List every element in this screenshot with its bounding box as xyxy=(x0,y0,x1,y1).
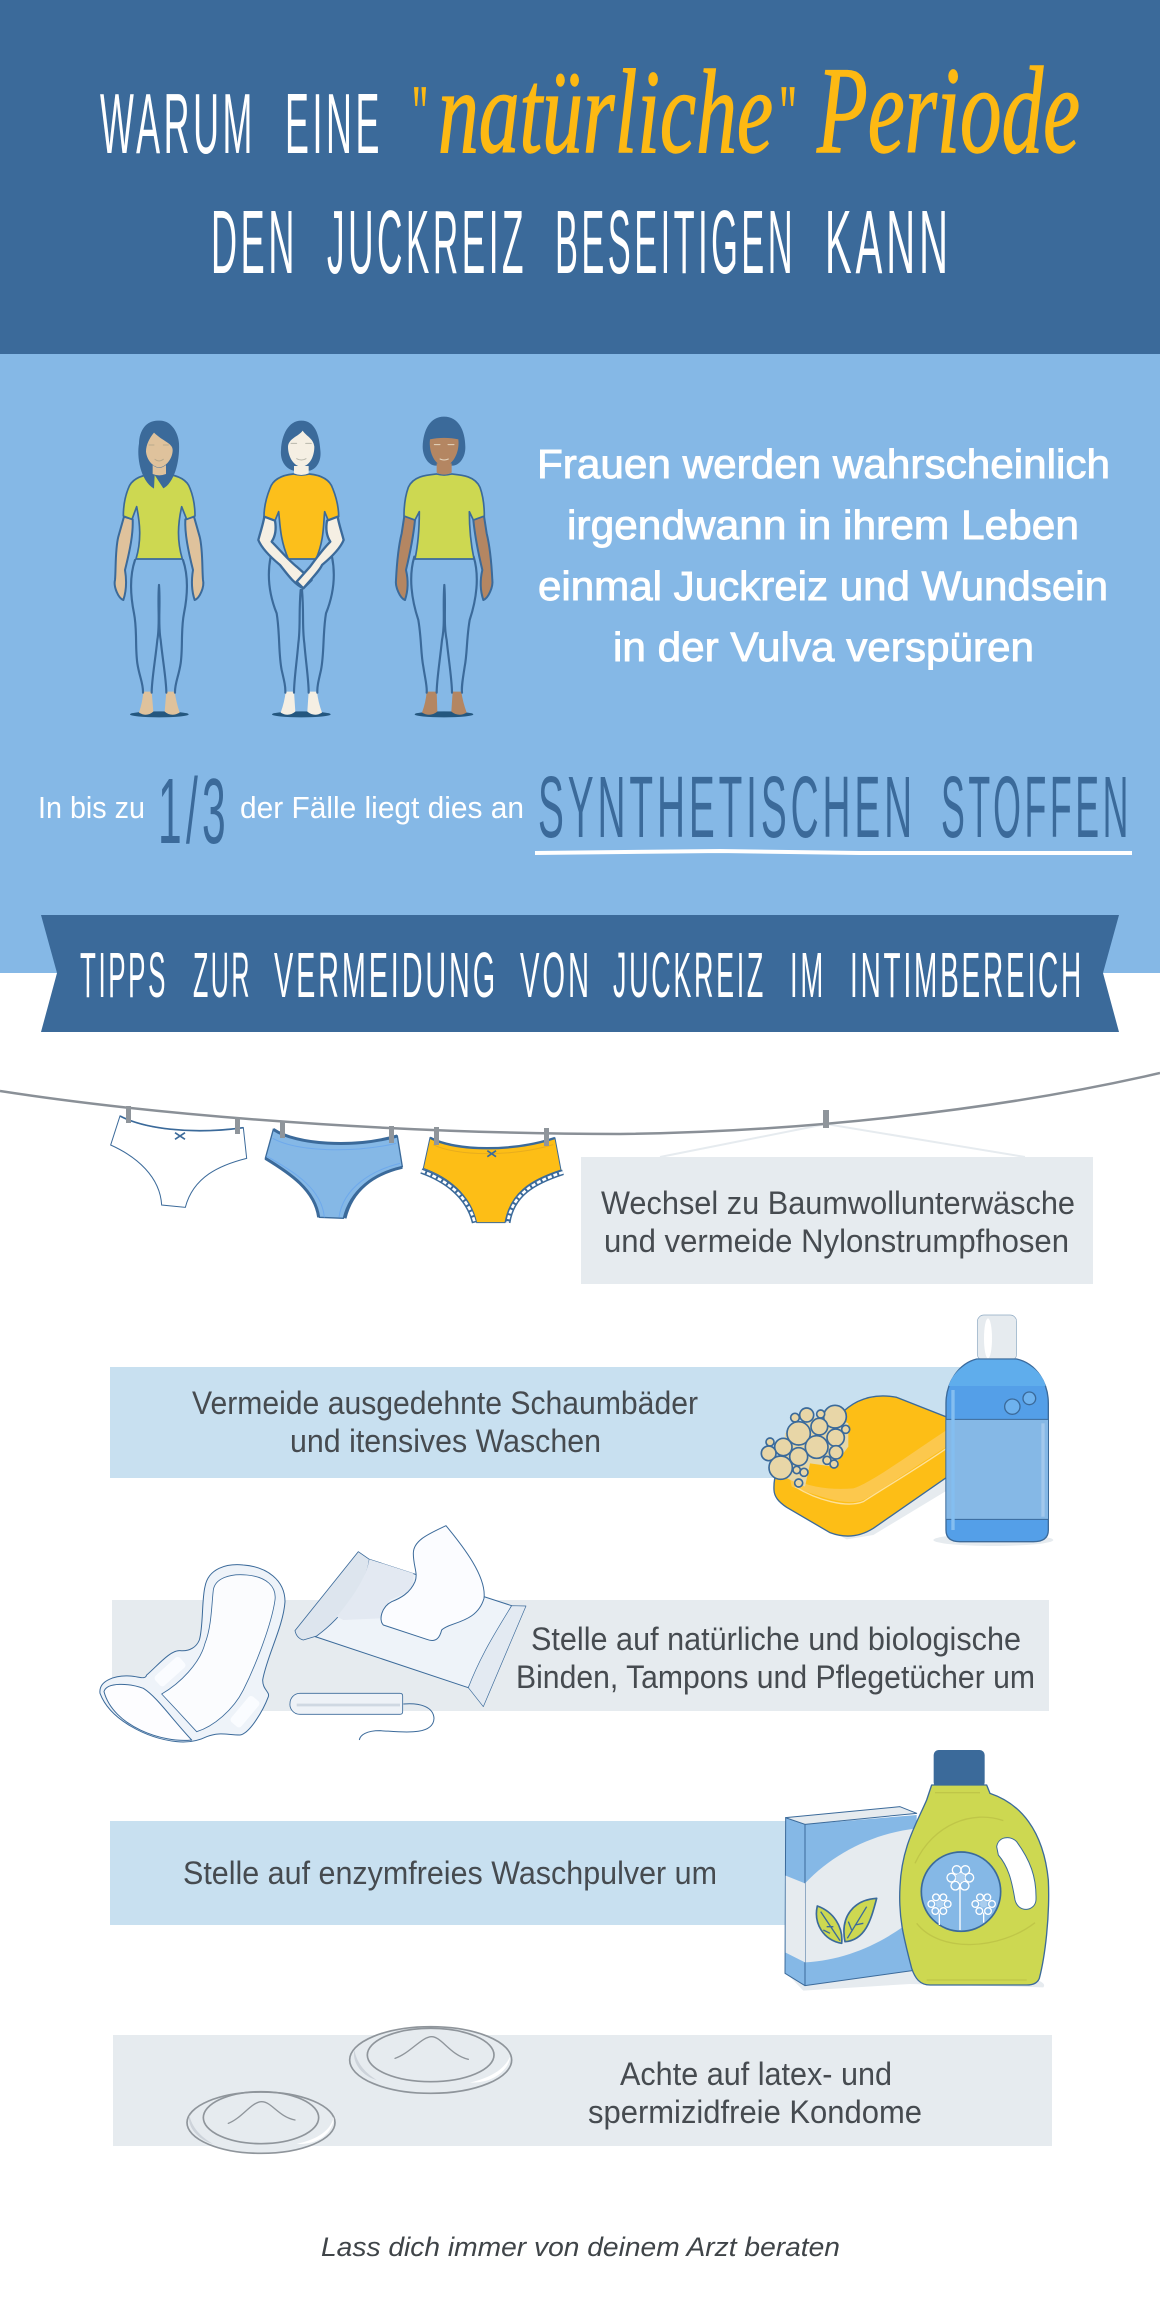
banner: JUCKREIZ xyxy=(613,939,766,1011)
clothesline with underwear xyxy=(0,1073,1160,1223)
icon: sanitary pad xyxy=(100,1565,285,1742)
title: JUCKREIZ xyxy=(327,193,527,293)
banner: VON xyxy=(520,939,592,1011)
tip 2 panel: und itensives Waschen xyxy=(290,1423,601,1459)
banner xyxy=(41,915,1119,1032)
panel: light blue intro xyxy=(0,354,1160,973)
icon: soap and bottle xyxy=(761,1315,1053,1546)
tip 2 panel: Vermeide ausgedehnte Schaumbäder xyxy=(192,1385,698,1421)
intro statement: in der Vulva verspüren xyxy=(613,624,1034,670)
one third statistic: der Fälle liegt dies an xyxy=(240,790,524,825)
tip 3 panel: Binden, Tampons und Pflegetücher um xyxy=(516,1659,1035,1695)
title: DEN xyxy=(211,193,298,293)
title: " xyxy=(777,70,799,158)
banner: VERMEIDUNG xyxy=(274,939,498,1011)
one third statistic xyxy=(38,759,1132,863)
tip 1 panel: Wechsel zu Baumwollunterwäsche xyxy=(601,1185,1075,1221)
title: " xyxy=(410,70,430,158)
tip 3 panel xyxy=(112,1600,1049,1711)
footer note: Lass dich immer von deinem Arzt beraten xyxy=(321,2232,840,2262)
tip 4 panel xyxy=(110,1821,790,1925)
panel: header xyxy=(0,0,1160,354)
tip 5 panel: spermizidfreie Kondome xyxy=(588,2094,922,2130)
tip 5 panel: Achte auf latex- und xyxy=(620,2056,892,2092)
tip 1 panel: und vermeide Nylonstrumpfhosen xyxy=(604,1223,1069,1259)
one third statistic: In bis zu xyxy=(38,790,145,825)
title: natürliche xyxy=(438,45,773,178)
icon: condoms xyxy=(187,2027,512,2153)
title xyxy=(100,42,1080,293)
three women illustration xyxy=(115,417,492,717)
banner: ZUR xyxy=(193,939,252,1011)
icon: condom small xyxy=(187,2092,335,2153)
intro statement xyxy=(537,441,1110,670)
title: WARUM xyxy=(100,77,256,172)
icon: tampon xyxy=(290,1693,434,1740)
tip 4 panel: Stelle auf enzymfreies Waschpulver um xyxy=(183,1855,717,1891)
intro statement: irgendwann in ihrem Leben xyxy=(567,502,1079,548)
banner: TIPPS xyxy=(80,939,168,1011)
tip 1 panel xyxy=(581,1124,1093,1284)
intro statement: einmal Juckreiz und Wundsein xyxy=(538,563,1108,609)
woman 3 xyxy=(396,417,492,717)
icon: soap with foam xyxy=(761,1396,953,1539)
icon: washing powder box xyxy=(785,1807,917,1986)
icon: wipes pack xyxy=(295,1526,526,1707)
icon: bottle xyxy=(933,1315,1053,1546)
tip 2 panel xyxy=(110,1367,960,1478)
icon: detergent box and bottle xyxy=(785,1750,1049,1991)
intro statement: Frauen werden wahrscheinlich xyxy=(537,441,1110,487)
tip 3 panel: Stelle auf natürliche und biologische xyxy=(531,1621,1021,1657)
tip 5 panel xyxy=(113,2035,1052,2146)
icon: pad, wipes and tampon xyxy=(100,1526,526,1742)
banner: IM xyxy=(790,939,826,1011)
title: EINE xyxy=(285,77,383,172)
clothes pegs xyxy=(126,1106,829,1146)
icon: condom large xyxy=(350,2027,512,2093)
title: KANN xyxy=(825,193,952,293)
underwear on line xyxy=(111,1116,563,1223)
one third statistic: 1/3 xyxy=(158,759,230,863)
icon: detergent bottle xyxy=(900,1750,1049,1985)
woman 1 xyxy=(115,421,203,717)
woman 2 xyxy=(258,421,344,717)
